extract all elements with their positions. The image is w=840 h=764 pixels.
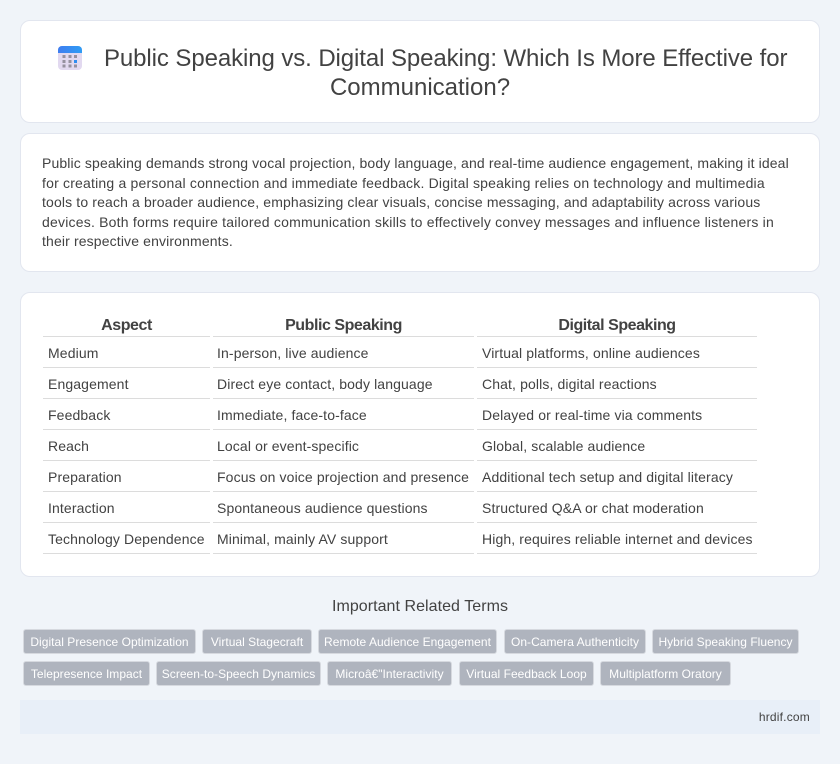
table header: Public Speaking bbox=[285, 317, 402, 334]
row: Reach: Reach bbox=[48, 438, 89, 454]
intro paragraph: Public speaking demands strong vocal projection, body language, and real-time audience engagement, making it ideal bbox=[42, 155, 789, 171]
title: Communication? bbox=[330, 74, 510, 101]
row: Medium: In-person, live audience bbox=[217, 345, 369, 361]
row: Medium bbox=[48, 345, 700, 361]
related term tags: Virtual Feedback Loop bbox=[466, 667, 587, 681]
related term tags: Hybrid Speaking Fluency bbox=[658, 635, 793, 649]
panel: title card bbox=[20, 20, 820, 123]
row: Engagement: Engagement bbox=[48, 376, 129, 392]
row: Technology Dependence: Technology Dependence bbox=[48, 531, 205, 547]
panel: intro text bbox=[20, 133, 820, 272]
row: Reach: Local or event-specific bbox=[217, 438, 359, 454]
row: Preparation: Additional tech setup and digital literacy bbox=[482, 469, 733, 485]
related term tags: Multiplatform Oratory bbox=[609, 667, 722, 681]
row: Medium: Virtual platforms, online audiences bbox=[482, 345, 700, 361]
icon: calendar bbox=[58, 46, 82, 70]
row: Medium: Medium bbox=[48, 345, 99, 361]
row: Preparation: Preparation bbox=[48, 469, 122, 485]
table header: Digital Speaking bbox=[558, 317, 676, 334]
row: Feedback: Immediate, face-to-face bbox=[217, 407, 367, 423]
row: Interaction bbox=[48, 500, 704, 516]
intro paragraph: devices. Both forms require tailored communication skills to effectively convey messages and influence listeners in bbox=[42, 214, 774, 230]
heading: related terms: Important Related Terms bbox=[332, 598, 508, 615]
comparison table bbox=[43, 317, 757, 554]
related term tags: On-Camera Authenticity bbox=[511, 635, 639, 649]
row: Technology Dependence bbox=[48, 531, 753, 547]
intro paragraph: their respective environments. bbox=[42, 233, 233, 249]
intro paragraph bbox=[42, 155, 789, 249]
related term tags: Telepresence Impact bbox=[31, 667, 142, 681]
row: Feedback: Feedback bbox=[48, 407, 110, 423]
row: Technology Dependence: Minimal, mainly AV support bbox=[217, 531, 388, 547]
footer bar bbox=[20, 700, 820, 734]
row: Engagement: Direct eye contact, body language bbox=[217, 376, 433, 392]
footer credit: hrdif.com bbox=[759, 710, 810, 724]
related term tags: Screen-to-Speech Dynamics bbox=[162, 667, 315, 681]
row: Engagement bbox=[48, 376, 657, 392]
intro paragraph: for creating a personal connection and immediate feedback. Digital speaking relies on technology and multimedia bbox=[42, 175, 765, 191]
row: Reach bbox=[48, 438, 645, 454]
table header bbox=[101, 317, 676, 334]
row: Reach: Global, scalable audience bbox=[482, 438, 645, 454]
related term tags: Remote Audience Engagement bbox=[324, 635, 491, 649]
row: Interaction: Spontaneous audience questions bbox=[217, 500, 428, 516]
row: Preparation bbox=[48, 469, 733, 485]
title bbox=[104, 45, 788, 101]
row: Preparation: Focus on voice projection and presence bbox=[217, 469, 469, 485]
related term tags bbox=[23, 629, 799, 686]
related term tags: Virtual Stagecraft bbox=[211, 635, 303, 649]
related term tags: Microâ€"Interactivity bbox=[335, 667, 444, 681]
row: Feedback bbox=[48, 407, 702, 423]
title: Public Speaking vs. Digital Speaking: Which Is More Effective for bbox=[104, 45, 787, 72]
intro paragraph: tools to reach a broader audience, emphasizing clear visuals, concise messaging, and adaptability across various bbox=[42, 194, 760, 210]
related term tags: Digital Presence Optimization bbox=[30, 635, 189, 649]
row: Technology Dependence: High, requires reliable internet and devices bbox=[482, 531, 753, 547]
row: Feedback: Delayed or real-time via comments bbox=[482, 407, 702, 423]
row: Engagement: Chat, polls, digital reactions bbox=[482, 376, 657, 392]
panel: comparison table bbox=[20, 292, 820, 577]
row: Interaction: Interaction bbox=[48, 500, 115, 516]
row: Interaction: Structured Q&A or chat moderation bbox=[482, 500, 704, 516]
table header: Aspect bbox=[101, 317, 152, 334]
